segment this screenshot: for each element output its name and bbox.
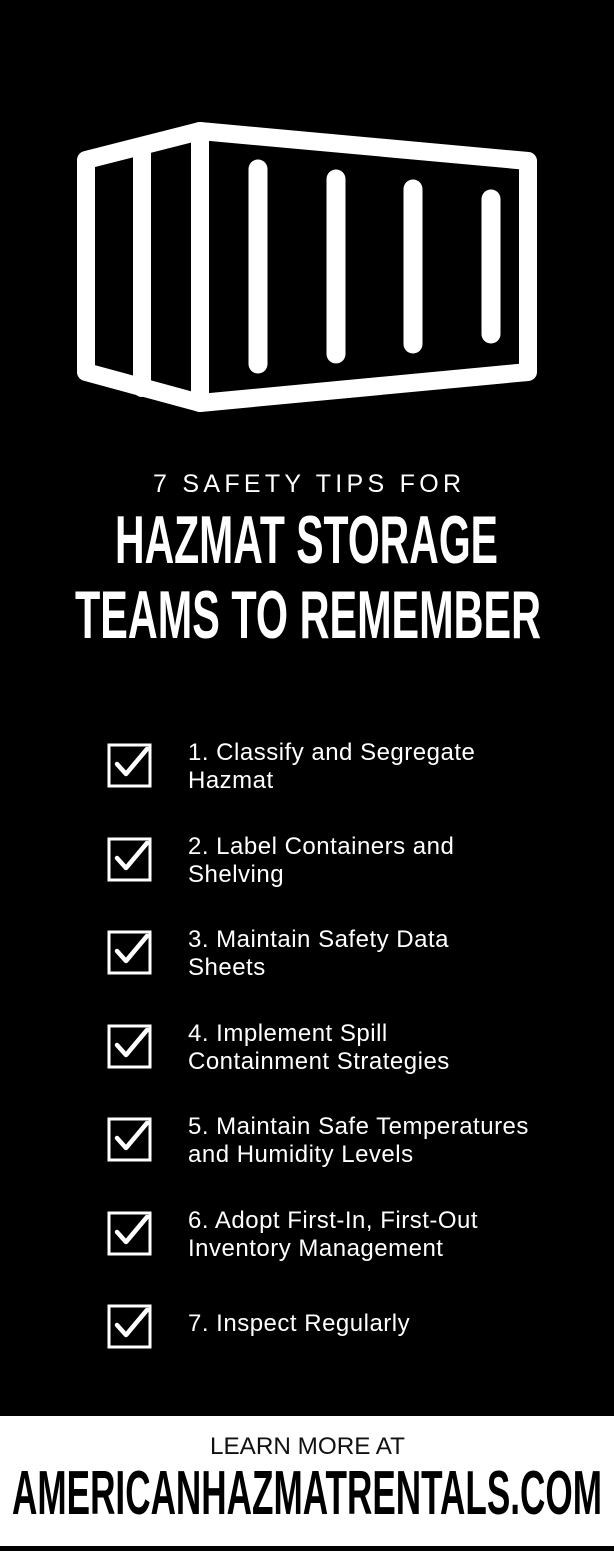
item 2: 2. Label Containers and: [188, 832, 454, 860]
title block: [75, 470, 541, 650]
item 4: [108, 1020, 450, 1074]
item 3: 3. Maintain Safety Data: [188, 926, 449, 953]
item 1: Hazmat: [188, 767, 274, 794]
icon: shipping container: [77, 122, 537, 412]
item 6: Inventory Management: [188, 1234, 443, 1262]
item 4: Containment Strategies: [188, 1048, 450, 1074]
item 2: [108, 832, 454, 888]
item 6: [108, 1206, 478, 1262]
item 5: 5. Maintain Safe Temperatures: [188, 1113, 529, 1140]
item 7: [108, 1304, 410, 1348]
item 2: Shelving: [188, 860, 284, 888]
item 3: Sheets: [188, 954, 266, 981]
item 5: and Humidity Levels: [188, 1141, 414, 1168]
item 3: [108, 926, 449, 981]
item 1: [108, 739, 475, 794]
item 1: 1. Classify and Segregate: [188, 739, 475, 766]
subtitle: 7 SAFETY TIPS FOR: [153, 470, 461, 498]
checklist: [108, 739, 529, 1348]
item 6: 6. Adopt First-In, First-Out: [188, 1206, 478, 1234]
footer: [0, 1416, 614, 1546]
item 5: [108, 1113, 529, 1168]
item 7: 7. Inspect Regularly: [188, 1310, 410, 1337]
item 4: 4. Implement Spill: [188, 1020, 388, 1046]
footer label: LEARN MORE AT: [210, 1433, 405, 1460]
